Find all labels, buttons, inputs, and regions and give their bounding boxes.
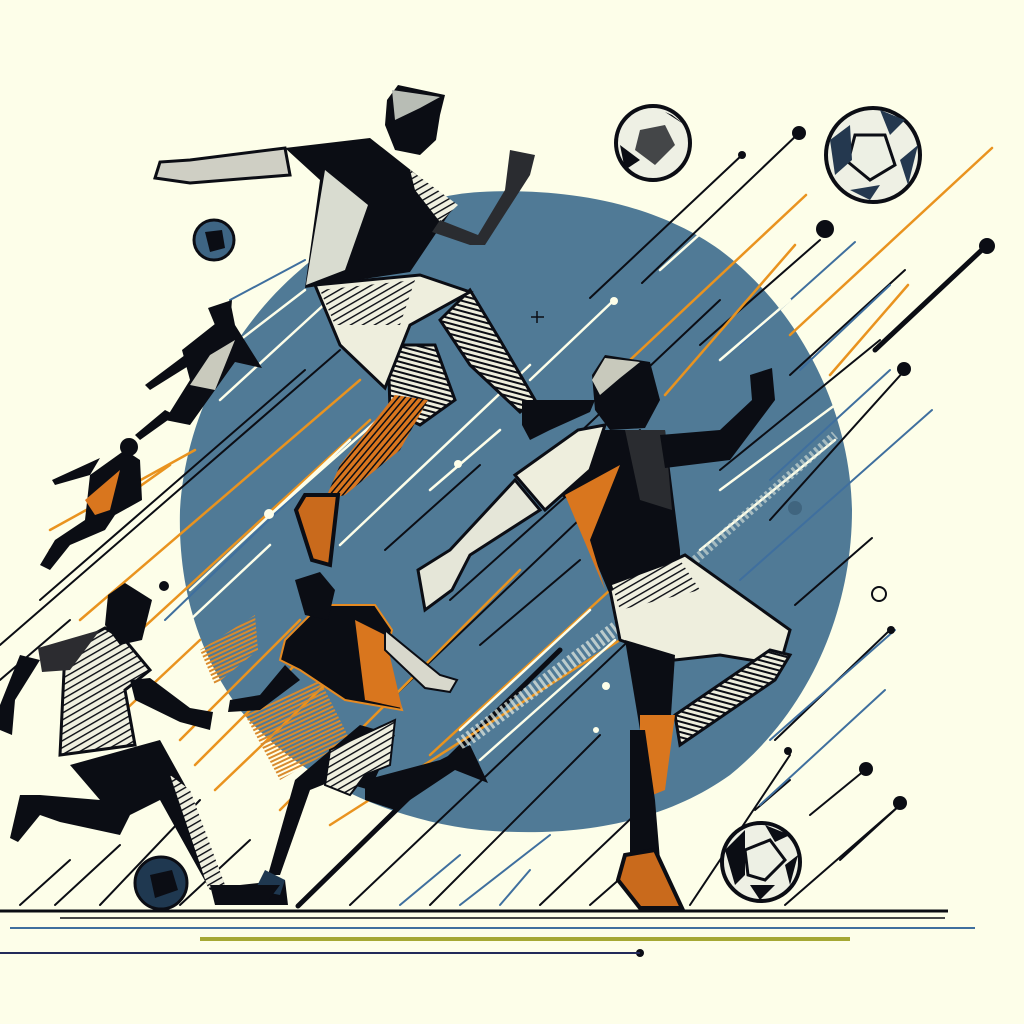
footballs [135, 106, 920, 909]
ball top [616, 106, 690, 180]
blue speed lines [165, 242, 932, 905]
torso [285, 138, 455, 288]
player: bottom centre [228, 572, 488, 905]
shirt [515, 430, 680, 595]
arms [0, 655, 40, 735]
shorts shading [612, 560, 700, 610]
head [592, 355, 660, 430]
ball bottom right [722, 823, 800, 901]
speed lines [0, 132, 992, 906]
orange hatched patches [200, 615, 258, 685]
player: far mid left [135, 300, 262, 440]
boot [618, 850, 682, 908]
lower arm [418, 480, 540, 610]
player: far top left [40, 438, 142, 570]
front boot [522, 400, 595, 440]
ball left small [194, 220, 234, 260]
shorts [315, 275, 470, 388]
front leg [440, 290, 535, 412]
hatched white streaks [460, 625, 620, 745]
small dark plus and faint dot [531, 311, 544, 323]
head [385, 85, 445, 155]
back calf orange [325, 395, 428, 500]
legs [268, 725, 395, 875]
heavy black lines [875, 247, 985, 350]
shorts shading [320, 280, 415, 325]
arms [155, 148, 290, 183]
ball top right [826, 108, 920, 202]
line end dots [159, 126, 995, 957]
small ring marker [872, 587, 886, 601]
blue circle backdrop [180, 191, 852, 832]
shirt [60, 628, 150, 755]
legs [10, 740, 225, 890]
white speed lines [190, 225, 835, 760]
arms [228, 665, 300, 712]
ball at feet [135, 857, 187, 909]
raised arm [660, 368, 775, 468]
back thigh [388, 345, 455, 425]
head [295, 572, 335, 620]
shorts [610, 555, 790, 665]
player: top jumping [155, 85, 595, 565]
black speed lines [0, 132, 905, 905]
player: bottom left [0, 583, 280, 905]
orange speed lines [50, 148, 992, 825]
player: right standing [418, 355, 790, 908]
ground lines [0, 911, 975, 953]
boot [240, 880, 288, 905]
back boot [296, 495, 338, 565]
head [105, 583, 152, 645]
legs [625, 640, 675, 730]
shirt [280, 605, 402, 710]
